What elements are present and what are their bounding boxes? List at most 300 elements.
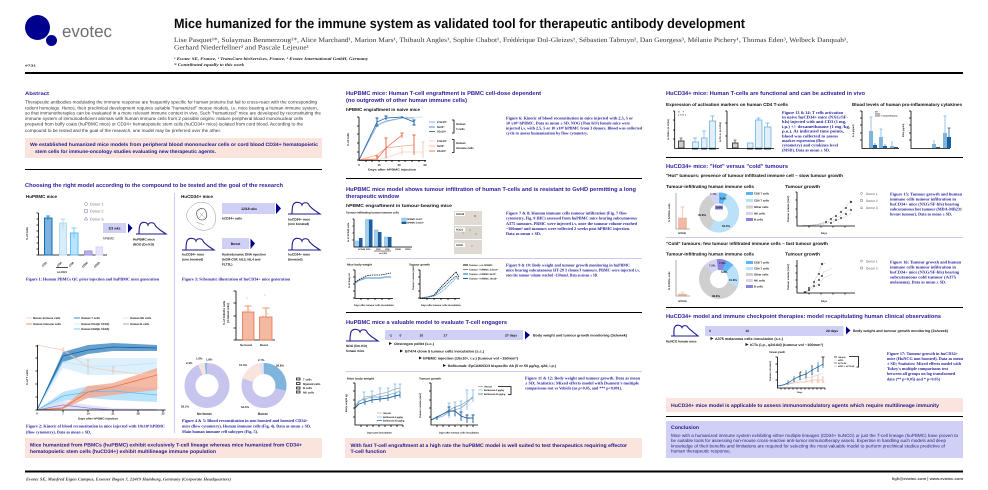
icon: boosted mouse: huCD34+ mice: [288, 252, 310, 256]
line chart: mice body weight (fig 11): Mice body weight: [347, 376, 374, 380]
arrow: 2/3 wks: hPBMC: [103, 236, 115, 240]
scatter chart: hot tumour growth: Tumour growth: [785, 184, 820, 189]
caption: figure 9 and 10: [506, 262, 640, 278]
bar chart: cold infiltration: % hCD45+ cells: [668, 271, 671, 290]
line chart: mice body weight (fig 9): % of body wt: [348, 273, 351, 288]
legend: naive engraftment: T-cells: [456, 127, 465, 131]
legend: fig 9 and 10: Tumour + hPBMC 5x10⁶: [469, 273, 496, 276]
legend: hot donors: Donor 3: [866, 206, 878, 210]
caption: figure 16: immune cells tumour infiltration in: [890, 264, 957, 270]
donut: cold tumour: 68.8%: [712, 294, 720, 298]
caption: figure 13 and 14: cytometry) and cytokines level: [782, 143, 839, 148]
line chart: naive engraftment: 30: [397, 163, 401, 167]
bar chart: cold infiltration: Tumour-infiltrating human immune cells: [666, 252, 755, 256]
heading: tumour infiltration: HuPBMC mice model shows tumour infiltration of human T-cells and is resistant to GvHD permitting a long: [346, 186, 637, 193]
panel: conclusion: be suitable tools for assessing non-mouse cross-reactive anti-tumor immunotherapy assets. Expertise in handling such models and deep: [671, 438, 947, 443]
line chart: tumour growth (fig 12): [419, 376, 511, 434]
bar chart: human CD45 boost: (in blood cells): [226, 303, 230, 323]
legend: donuts: T cells: [303, 378, 312, 382]
caption: figure 15: breast tumour). Data as mean ± SD.: [890, 212, 952, 216]
legend: cold donors: Donor 1: [866, 260, 878, 264]
arrow: 12/18 wks: hCD34+ cells: [222, 216, 242, 220]
line chart: tumour growth (fig 12): Days after tumour cells inoculation: [439, 432, 479, 434]
caption: figure 3: Figure 3: Schematic illustration of huCD34+ mice generation: [182, 276, 291, 282]
panel: abstract: immune system of immunodeficient animals with human immune cells from 2 possible origins: mature peripheral blood mononuclear cells: [25, 116, 304, 121]
caption: figure 17: ± SD; Statistics: Mixed effects model with: [887, 361, 962, 366]
caption: figure 9 and 10: once the tumour volume reached ~150mm3. Data as mean ± SD.: [506, 272, 598, 278]
area chart: kinetic of reconstitution: 35: [161, 412, 165, 416]
caption: figure 2: Figure 2: Kinetic of blood reconstitution in mice injected with 10x10⁶ hPBMC: [26, 424, 165, 428]
caption: figure 4 and 5: Main human immune cell subtypes (Fig. 5).: [182, 429, 258, 434]
bar chart: PBMC QC: CD56: [81, 261, 89, 269]
legend: checkpoint groups: aPD1: [838, 359, 844, 362]
line chart: mice body weight (fig 9): [347, 262, 394, 307]
caption: figure 13 and 14: p.o.). At indicated time points,: [782, 129, 844, 134]
timeline: T-cell engagers: Bofitumab: EpCAM/CD3 bispecific Ab (5 or 50 µg/kg, q2d, i.p.): [448, 364, 556, 368]
line chart: naive engraftment: 50: [423, 163, 427, 167]
icon: source mouse: huCD34+ mice: [182, 252, 204, 256]
legend: cold tumour cells: CD4 T cells: [754, 266, 770, 270]
bar chart: PBMC QC: % of cells: [25, 227, 29, 240]
legend: donuts: NK cells: [303, 390, 314, 394]
timeline: T-cell engagers: Oestrogen pellet (s.c.): [394, 342, 434, 346]
caption: figure 9 and 10: Figure 9 & 10: Body weight and tumour growth monitoring in huPBMC: [506, 262, 630, 268]
donut: hot tumour: 35.8%: [698, 213, 706, 217]
legend: checkpoint groups: aCTLA4: [838, 362, 847, 365]
callout: middle column conclusion: [345, 438, 642, 458]
area chart: kinetic of reconstitution: 21: [111, 412, 115, 416]
line chart: mice body weight (fig 11): Body weight (g): [345, 394, 348, 412]
bar chart: PBMC QC: [25, 213, 107, 274]
footer: address: Evotec SE, Manfred Eigen Campus, Essener Bogen 7, 22419 Hamburg, Germany (Corporate Headquarters): [25, 476, 232, 482]
donut: hot tumour: [698, 192, 734, 228]
image: IHC stains: [454, 211, 482, 254]
legend: naive engraftment: 2.5x10⁶: [437, 139, 448, 143]
icon: NOG mouse: female mice: [346, 349, 364, 353]
callout: left column conclusion: [25, 438, 322, 458]
line chart: mice body weight (fig 9): Days after tumour cells inoculation: [354, 304, 394, 307]
area chart: kinetic of reconstitution: Days after hPBMC injection: [78, 416, 118, 420]
bar chart: tumour infiltration: CD8: [385, 248, 390, 251]
panel: conclusion: Conclusion: [671, 425, 699, 431]
icon: NOG mouse: NOG (Dm KO): [346, 344, 367, 348]
donut: boost: [239, 358, 284, 416]
donut: boost: 54.3%: [241, 405, 249, 409]
arrow: 12/18 wks: [222, 203, 281, 220]
bar chart: PBMC QC: CD19: [93, 261, 101, 269]
affiliations: * Contributed equally to this work: [174, 62, 244, 67]
legend: naive engraftment: 5x10⁶: [437, 125, 445, 129]
donut: boost: Boost: [258, 412, 268, 416]
legend: donuts: Myeloid cells: [303, 382, 321, 386]
legend: hot donors: Donor 1: [866, 192, 878, 196]
bar chart: tumour infiltration: CD56: [395, 248, 401, 251]
legend: naive engraftment: 10x10⁶: [437, 149, 447, 153]
line chart: naive engraftment: 0: [358, 163, 360, 167]
callout: abstract: stem cells for immune-oncology studies evaluating new therapeutic agents.: [35, 149, 216, 155]
authors: [174, 37, 848, 52]
line chart: checkpoint tumour growth: [769, 350, 825, 394]
panel: abstract: [25, 91, 322, 133]
callout: left column conclusion: Mice humanized from PBMCs (huPBMC) exhibit exclusively T-cell lineage whereas mice humanized from CD34+: [30, 442, 302, 448]
icon: boosted mouse: [288, 238, 320, 262]
timeline: checkpoint therapies: 28 days: [826, 329, 838, 333]
timeline: T-cell engagers: Body weight and tumour growth monitoring (3x/week): [533, 334, 627, 338]
icon: huNCG mouse: HuNCG female mice: [666, 340, 697, 344]
panel: abstract: prepared from buffy coats (huPBMC mice) or CD34+ hematopoietic stem cells (huCD34+ mice) isolated from cord blood. According to the: [25, 122, 303, 126]
bar chart: tumour infiltration: % of hCD45 cells: [347, 222, 350, 242]
legend: hot tumour cells: CD4 T cells: [754, 198, 770, 202]
scatter chart: hot tumour growth: Tumour volume (mm³): [787, 196, 790, 222]
arrow: boost: FLT3L): [222, 262, 232, 266]
area chart: kinetic of reconstitution: 14: [86, 412, 90, 416]
legend: cold tumour cells: CD8 T cells: [754, 260, 770, 264]
caption: figure 16: huCD34+ mice (NXG/SF-hIs) bearing: [890, 270, 960, 274]
legend: hot tumour cells: CD8 T cells: [754, 192, 770, 196]
legend: donors: Donor 1: [90, 202, 104, 206]
icon: huPBMC mouse: (NOG (Dn KO): [133, 242, 154, 246]
line chart: naive engraftment: [346, 116, 427, 172]
caption: figure 7 and 8: cytometry, Fig. 8 IHC) assessed from huPBMC mice bearing subcutaneous: [506, 216, 637, 220]
legend: checkpoint groups: Vehicle: [838, 356, 846, 359]
legend: donors: Donor 2: [90, 210, 104, 214]
timeline: checkpoint therapies: 0: [709, 329, 711, 333]
caption: figure 6: 10 x10⁶ hPBMC. Data as mean ± SD. NOG (Jbm KO) female mice were: [506, 120, 630, 126]
arrow: 2/3 wks: 2/3 wks: [108, 226, 121, 230]
bar chart: cytokines C: [852, 110, 899, 148]
donut: boost: 15.4%: [239, 363, 247, 367]
legend: donors: Donor 3: [90, 218, 104, 222]
caption: figure 7 and 8: Data as mean ± SD.: [506, 231, 541, 236]
affiliations: [174, 56, 368, 67]
caption: figure 6: [506, 116, 643, 136]
bar chart: human CD45 boost: % of hCD45+ cells: [222, 300, 226, 325]
timeline: T-cell engagers: 17: [444, 334, 447, 338]
donut: cold tumour: 7.5%: [709, 264, 716, 268]
donut: no boost: 1.6%: [196, 356, 203, 360]
legend: naive engraftment: [429, 120, 474, 153]
legend: naive engraftment: immune cells: [456, 146, 474, 150]
donut: no boost: No boost: [197, 412, 213, 416]
donut: boost: 2.7%: [258, 358, 265, 362]
timeline: T-cell engagers: [385, 330, 627, 368]
legend: kinetic chart: Human NK cells: [130, 316, 152, 320]
donut: boost: 28.8%: [276, 364, 284, 368]
bar chart: tumour infiltration: Tumour-infiltrating human immune cells: [346, 210, 399, 214]
caption: figure 17: Tukey's multiple comparisons test: [887, 366, 949, 371]
line chart: mice body weight (fig 11): Bofitumab 5 µg/kg: [383, 416, 404, 419]
bar chart: cytokines D: [902, 111, 951, 148]
legend: naive engraftment: 2.5x10⁶: [437, 120, 448, 124]
bar chart: PBMC QC: CD8: [68, 261, 75, 268]
line chart: tumour growth (fig 12): Bofitumab 5 µg/kg: [484, 389, 505, 392]
legend: cold tumour cells: [746, 260, 770, 288]
timeline: checkpoint therapies: [705, 326, 948, 347]
logo: evotec: evotec: [62, 22, 112, 41]
arrow: boost: [222, 238, 266, 266]
bar chart: human CD45 boost: Boost: [260, 343, 268, 347]
legend: kinetic chart: [26, 316, 152, 331]
legend: hot donors: [860, 192, 878, 210]
arrow: boost: Hydrodynamic DNA injection: [222, 252, 266, 256]
legend: cold tumour cells: NK cells: [754, 278, 765, 282]
caption: figure 16: melanoma). Data as mean ± SD.: [890, 280, 946, 284]
donut: hot tumour: 6.8%: [720, 196, 727, 200]
legend: naive engraftment: Human: [456, 141, 466, 145]
heading: T-cell engagers: HuPBMC mice a valuable model to evaluate T-cell engagers: [346, 319, 507, 326]
heading: hot versus cold: HuCD34+ mice: "Hot" versus "cold" tumours: [666, 163, 788, 170]
legend: naive engraftment: 10x10⁶: [437, 130, 447, 134]
timeline: T-cell engagers: hPBMC injection (10x10⁶, i.v.) (tumour vol ~150mm³): [423, 356, 518, 360]
arrow: boost: Boost: [231, 242, 241, 246]
subheading: naive mice: hPBMC engraftment in naive mice: [346, 107, 421, 112]
legend: cold donors: [860, 260, 878, 270]
line chart: mice body weight (fig 11): Bofitumab 50 µg/kg: [383, 420, 405, 422]
bar chart: cytokines C: IL-6 (pg/ml): [852, 124, 855, 137]
callout: right column conclusion: [666, 398, 963, 412]
bar chart: cytokines C: αCD3: [875, 112, 881, 116]
bar chart: cytokines C: αCD3 + dexamethasone: [875, 114, 899, 118]
bar chart: activation marker B: [719, 111, 774, 149]
area chart: kinetic of reconstitution: 0: [36, 412, 38, 416]
subheading: cytokines: Blood levels of human pro-inflammatory cytokines: [852, 102, 963, 107]
arrow: boost: (hGM-CSF, hIL3, hIL4 and: [222, 258, 260, 262]
line chart: tumour growth (fig 10): Tumour growth: [409, 262, 430, 266]
donut: no boost: 93.3%: [181, 404, 189, 408]
legend: naive engraftment: 5x10⁶: [437, 144, 445, 148]
legend: hot tumour cells: Other cells: [754, 205, 769, 209]
caption: figure 13 and 14: in naive huCD34+ mice (NXG/SF-: [782, 115, 849, 120]
caption: figure 2: [26, 424, 165, 434]
caption: figure 17: data (** p<0.05) and * p<0.05): [887, 376, 941, 382]
icon: boosted mouse: (boosted): [288, 258, 303, 262]
donut: hot tumour: 7.7%: [710, 192, 717, 196]
area chart: kinetic of reconstitution: [25, 343, 166, 420]
legend: cold tumour cells: B cells: [754, 284, 763, 288]
legend: hot tumour cells: NK cells: [754, 212, 765, 216]
panel: abstract: Therapeutic antibodies modulating the immune response are frequently specific for human proteins but fail to cross-react with the corresponding: [25, 100, 318, 104]
scatter chart: cold tumour growth: Tumour volume (mm³): [787, 264, 790, 290]
caption: figure 13 and 14: i.p.) +/- dexamethasone (1 mg /kg,: [782, 124, 850, 129]
callout: abstract: [25, 138, 322, 158]
line chart: mice body weight (fig 11): Vehicle: [383, 412, 392, 415]
icon: non boosted mouse: (non boosted): [288, 222, 309, 226]
caption: figure 7 and 8: [506, 210, 638, 236]
legend: checkpoint groups: [834, 356, 858, 368]
caption: figure 4 and 5: mice (flow cytometry). Human immune cells (Fig. 4). Data as mean ± SD.: [182, 424, 311, 428]
caption: figure 15: [890, 192, 963, 216]
caption: figure 11 and 12: ± SD; Statistics: Mixed effects model with Dunnett's multiple: [525, 380, 639, 386]
panel: abstract: compound to be tested and the goal of the research, one model may be preferred over the other.: [25, 128, 221, 133]
line chart: tumour growth (fig 12): Tumour growth: [419, 376, 441, 380]
heading: huCD34 mice: HuCD34+ mice: [181, 194, 214, 199]
caption: figure 17: Figure 17: Tumour growth in huCD34+: [887, 351, 959, 356]
legend: donors: [84, 202, 104, 222]
bar chart: hot infiltration: [666, 184, 755, 235]
bar chart: activation marker A: αCD3: [678, 114, 687, 116]
scatter chart: cold tumour growth: [785, 252, 855, 303]
bar chart: tumour infiltration: on CD3: [379, 252, 387, 255]
area chart: kinetic of reconstitution: % of T cells: [25, 369, 29, 385]
caption: figure 1: Figure 1: Human PBMCs QC prior injection and huPBMC mice generation: [26, 276, 160, 282]
caption: figure 2: (flow cytometry). Data as mean ± SD.: [26, 430, 91, 434]
line chart: checkpoint tumour growth: Days: [797, 391, 803, 394]
arrow: 2/3 wks: [103, 223, 132, 240]
caption: figure 17: [887, 351, 964, 382]
timeline: checkpoint therapies: ICTs (i.p., q2d-6d) (tumour vol ~100mm³): [750, 343, 823, 347]
line chart: mice body weight (fig 11): [345, 376, 405, 434]
bar chart: activation marker B: % PD-1+ (in hCD4): [719, 122, 722, 142]
bar chart: tumour infiltration: hCD45: [358, 248, 366, 251]
heading: tumour infiltration: therapeutic window: [346, 193, 400, 200]
bar chart: tumour infiltration: CD19: [405, 248, 411, 251]
heading: choosing the right model: Choosing the right model according to the compound to be tested and the goal of the research: [25, 182, 284, 189]
legend: hot tumour cells: [746, 192, 770, 222]
legend: naive engraftment: Human: [456, 122, 466, 126]
callout: middle column conclusion: With fast T-cell engraftment at a high rate the huPBMC model is well suited to test therapeutics requiring effector: [350, 443, 627, 449]
donut: cold tumour: [704, 261, 737, 298]
line chart: tumour growth (fig 12): Vehicle: [484, 386, 493, 388]
legend: fig 9 and 10: Tumour + no hPBMC: [469, 264, 493, 267]
timeline: T-cell engagers: BT474 clone 5 tumour cells inoculation (s.c.): [405, 350, 484, 354]
bar chart: hot infiltration: % hCD45+ cells: [668, 203, 671, 222]
line chart: tumour growth (fig 10): Days after tumour cells inoculation: [421, 304, 461, 307]
caption: figure 4 and 5: Figure 4 & 5: Blood reconstitution in non boosted and boosted CD34+: [182, 418, 309, 423]
timeline: T-cell engagers: 27 days: [505, 334, 517, 338]
legend: checkpoint groups: aPD1 + aCTLA4: [838, 365, 855, 368]
icon: huPBMC mouse: HuPBMC mice: [133, 238, 155, 242]
bar chart: activation marker A: NT: [678, 110, 685, 114]
affiliations: ¹ Evotec SE, France, ² TransCure bioServices, France, ³ Evotec International GmbH, Germany: [174, 56, 368, 61]
line chart: tumour growth (fig 10): Tumour volume (mm³): [412, 265, 415, 290]
caption: figure 16: subcutaneous cold tumour (A375: [890, 274, 956, 280]
line chart: naive engraftment: Days after hPBMC injection: [368, 168, 416, 172]
bar chart: cold infiltration: [666, 252, 755, 303]
icon: source mouse: (non boosted): [182, 258, 203, 262]
caption: figure 13 and 14: hIs) injected with anti-CD3 (1 mg,: [782, 119, 846, 124]
legend: cold tumour cells: Other cells: [754, 272, 769, 276]
bar chart: hot infiltration: Tumour-infiltrating human immune cells: [666, 184, 755, 189]
caption: figure 13 and 14: blood was collected to assess: [782, 133, 838, 138]
bar chart: PBMC QC: on CD3: [57, 270, 67, 274]
subheading: activation markers: Expression of activation markers on human CD4 T-cells: [666, 102, 789, 107]
panel: conclusion: knowledge of their benefits and limitations are required for selecting the most valuable model to perform preclinical studies predictive of: [671, 444, 946, 448]
caption: figure 7 and 8: ~100mm³ and tumours were collected 2 weeks post hPBMC injection.: [506, 226, 630, 231]
legend: hot donors: Donor 2: [866, 199, 878, 203]
caption: figure 15: Figure 15: Tumour growth and human: [890, 192, 963, 196]
callout: middle column conclusion: T-cell function: [350, 449, 386, 455]
bar chart: PBMC QC: CD3: [41, 261, 48, 268]
icon: NOG mouse: [346, 329, 378, 353]
icon: non boosted mouse: [288, 202, 320, 226]
donut: no boost: 1.8%: [206, 358, 213, 362]
legend: kinetic chart: Human immune cells: [33, 322, 61, 326]
image: IHC stains: hCD45: [456, 213, 465, 216]
caption: figure 11 and 12: [525, 376, 641, 390]
caption: figure 17: between all groups on log transformed: [887, 371, 956, 376]
line chart: tumour growth (fig 12): Bofitumab 50 µg/kg: [484, 393, 506, 396]
area chart: kinetic of reconstitution: 28: [136, 412, 140, 416]
donut: hot tumour: 0.9%: [716, 206, 723, 210]
caption: figure 7 and 8: A375 tumours. PBMC were injected i.v. once the tumour volume reached: [506, 221, 638, 226]
bar chart: tumour infiltration: [346, 210, 424, 255]
image: IHC stains: hCD3: [456, 228, 463, 232]
caption: figure 11 and 12: Figure 11 & 12: Body weight and tumour growth. Data as mean: [525, 376, 641, 380]
panel: abstract: rodent homologs. Hence, their preclinical development requires suitable "humanized" mouse models, i.e. mice bearing a human immune system,: [25, 106, 318, 110]
caption: figure 11 and 12: comparisons test vs Vehicle (ns p>0.05, and *** p<0.001).: [525, 386, 622, 390]
callout: right column conclusion: HuCD34+ mice model is applicable to assess immunomodulatory agents which require multilineage immunity: [671, 403, 939, 409]
timeline: T-cell engagers: 0: [400, 334, 402, 338]
legend: kinetic chart: Human CD8(in hCD3): [81, 327, 109, 331]
timeline: checkpoint therapies: A375 melanoma cells inoculation (s.c.): [715, 337, 783, 341]
subheading: cold tumours: "Cold" tumours: few tumour infiltrated immune cells – fast tumour growth: [666, 241, 828, 246]
heading: huPBMC mice: HuPBMC mice: [26, 194, 58, 199]
scatter chart: cold tumour growth: Days: [821, 300, 828, 303]
bar chart: cold infiltration: hCD34+: [678, 300, 688, 303]
heading: T-cell engraftment: [346, 90, 541, 104]
bar chart: PBMC QC: CD4: [56, 261, 63, 268]
bar chart: tumour infiltration: hPBMC 10x10⁶: [407, 222, 424, 224]
caption: figure 15: huCD34+ mice (NXG/SF-hIs) bearing: [890, 202, 960, 206]
timeline: checkpoint therapies: Body weight and tumour growth monitoring (2x/week): [853, 329, 948, 333]
legend: donuts: [296, 378, 321, 394]
caption: figure 4 and 5: [182, 418, 311, 434]
donut: cold tumour: 7.0%: [719, 261, 726, 265]
caption: figure 16: [890, 260, 962, 284]
legend: kinetic chart: Mouse immune cells: [33, 316, 61, 320]
caption: figure 17: mice (HuNCG non boosted). Data as mean: [887, 356, 964, 361]
image: IHC stains: hCD8: [456, 244, 463, 247]
line chart: checkpoint tumour growth: Tumour vol (mm³): [769, 361, 772, 381]
legend: donuts: B cells: [303, 386, 312, 390]
scatter chart: cold tumour growth: Tumour growth: [785, 252, 820, 256]
bar chart: cytokines D: IFNγ (pg/ml): [902, 123, 905, 137]
donut: no boost: [181, 356, 224, 416]
bar chart: tumour infiltration: CD4: [376, 248, 381, 251]
authors: Lise Pasquet¹*, Sulayman Benmerzoug²*, Alice Marchand¹, Marion Mars¹, Thibault Angles¹, Sophie Chabot¹, Frédérique Dol-Gleizes¹, Sébastien Tabruyn², Dan Georgess³, Mélanie Pichery¹, Thomas Eden³, Welbeck Danquah³,: [174, 37, 848, 44]
bar chart: human CD45 boost: [222, 291, 275, 347]
legend: kinetic chart: Human CD4(in hCD3): [81, 322, 109, 326]
panel: conclusion: [666, 421, 963, 458]
subheading: hot tumours: "Hot" tumours: presence of tumour infiltrated immune cell – slow tumour growth: [666, 173, 843, 178]
legend: kinetic chart: Human T cells: [81, 316, 100, 320]
line chart: naive engraftment: 15: [377, 163, 381, 167]
scatter chart: hot tumour growth: Days: [821, 232, 828, 235]
legend: cold donors: Donor 2: [866, 266, 878, 270]
caption: figure 13 and 14: (MSD). Data as mean ± SD.: [782, 147, 830, 152]
poster number: #731: [25, 64, 37, 68]
donut: hot tumour: 53.0%: [722, 224, 730, 228]
callout: left column conclusion: hematopoietic stem cells (huCD34+) exhibit multilineage immune population: [30, 449, 216, 455]
legend: fig 9 and 10: Tumour + hPBMC 2.5x10⁶: [469, 268, 498, 272]
caption: figure 6: cycle to assess humanization by flow cytometry.: [506, 130, 588, 136]
footer: contact: ligh@evotec.com | www.evotec.com: [892, 477, 964, 481]
line chart: naive engraftment: % of cells: [346, 133, 350, 146]
icon: huNCG mouse: [666, 325, 698, 344]
arrow: 12/18 wks: 12/18 wks: [241, 207, 257, 211]
legend: fig 9 and 10: Tumour + hPBMC 10x10⁶: [469, 278, 497, 280]
bar chart: human CD45 boost: No boost: [240, 343, 252, 347]
icon: source mouse: [182, 238, 214, 262]
panel: conclusion: Mice with a humanized immune system exhibiting either multiple lineages (CD34+ huNCG) or just the T-cell lineage (huPBMC) have proven to: [671, 433, 959, 438]
legend: fig 9 and 10: [463, 264, 498, 280]
bar chart: activation marker A: [667, 110, 719, 149]
caption: figure 9 and 10: mice bearing subcutaneous HT-29 3 clones/J tumours. PBMC were injected i.v.: [506, 268, 640, 272]
donut: cold tumour: 5.8%: [721, 270, 728, 274]
caption: figure 15: immune cells tumour infiltration in: [890, 196, 957, 202]
legend: kinetic chart: Human B cells: [130, 322, 150, 326]
bar chart: tumour infiltration: CD3: [366, 248, 371, 251]
